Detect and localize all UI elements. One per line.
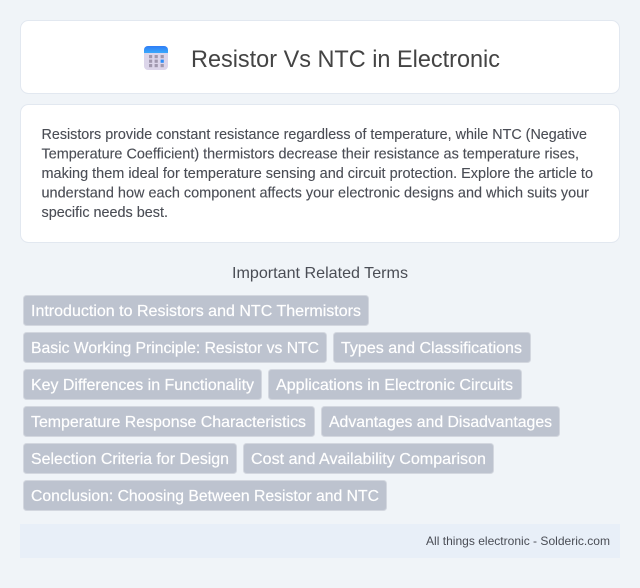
tag: selection criteria: Selection Criteria for Design: [31, 451, 229, 468]
tag: applications: Applications in Electronic Circuits: [276, 377, 513, 394]
text block: description: Temperature Coefficient) thermistors decrease their resistance as temperature rises,: [42, 146, 579, 162]
tag: basic working principle: [24, 332, 326, 362]
tag: selection criteria: [24, 444, 236, 474]
tag: key differences: [24, 370, 262, 400]
tag: types and classifications: [334, 332, 530, 362]
tag list: related terms: [24, 296, 560, 510]
tag: introduction: Introduction to Resistors and NTC Thermistors: [31, 303, 361, 320]
tag: applications: [268, 370, 522, 400]
tag: conclusion: [24, 480, 386, 510]
panel: description: [20, 104, 620, 242]
text block: description: specific needs best.: [42, 205, 168, 221]
tag: temperature response: [24, 406, 314, 436]
title: Resistor Vs NTC in Electronic: [191, 46, 500, 73]
text block: description: understand how each component affects your electronic designs and which suits your: [42, 186, 589, 202]
tag: cost and availability: [244, 444, 494, 474]
icon: calendar: [144, 46, 168, 70]
footer: [20, 524, 620, 558]
tag: cost and availability: Cost and Availability Comparison: [251, 451, 486, 468]
tag: key differences: Key Differences in Functionality: [31, 377, 254, 394]
text block: description: [42, 127, 593, 221]
text block: description: Resistors provide constant resistance regardless of temperature, while NTC (Negative: [42, 127, 587, 143]
tag: temperature response: Temperature Response Characteristics: [31, 414, 306, 431]
tag: advantages: [322, 406, 560, 436]
tag: types and classifications: Types and Classifications: [341, 340, 522, 357]
tag: basic working principle: Basic Working Principle: Resistor vs NTC: [31, 340, 319, 357]
tag: advantages: Advantages and Disadvantages: [329, 414, 552, 431]
heading: important related terms: Important Related Terms: [232, 265, 408, 282]
tag: conclusion: Conclusion: Choosing Between Resistor and NTC: [31, 488, 379, 505]
text block: description: making them ideal for temperature sensing and circuit protection. Explore the article to: [42, 166, 593, 182]
panel: title card: [20, 20, 620, 94]
tag: introduction: [24, 296, 368, 326]
footer: All things electronic - Solderic.com: [426, 534, 610, 548]
